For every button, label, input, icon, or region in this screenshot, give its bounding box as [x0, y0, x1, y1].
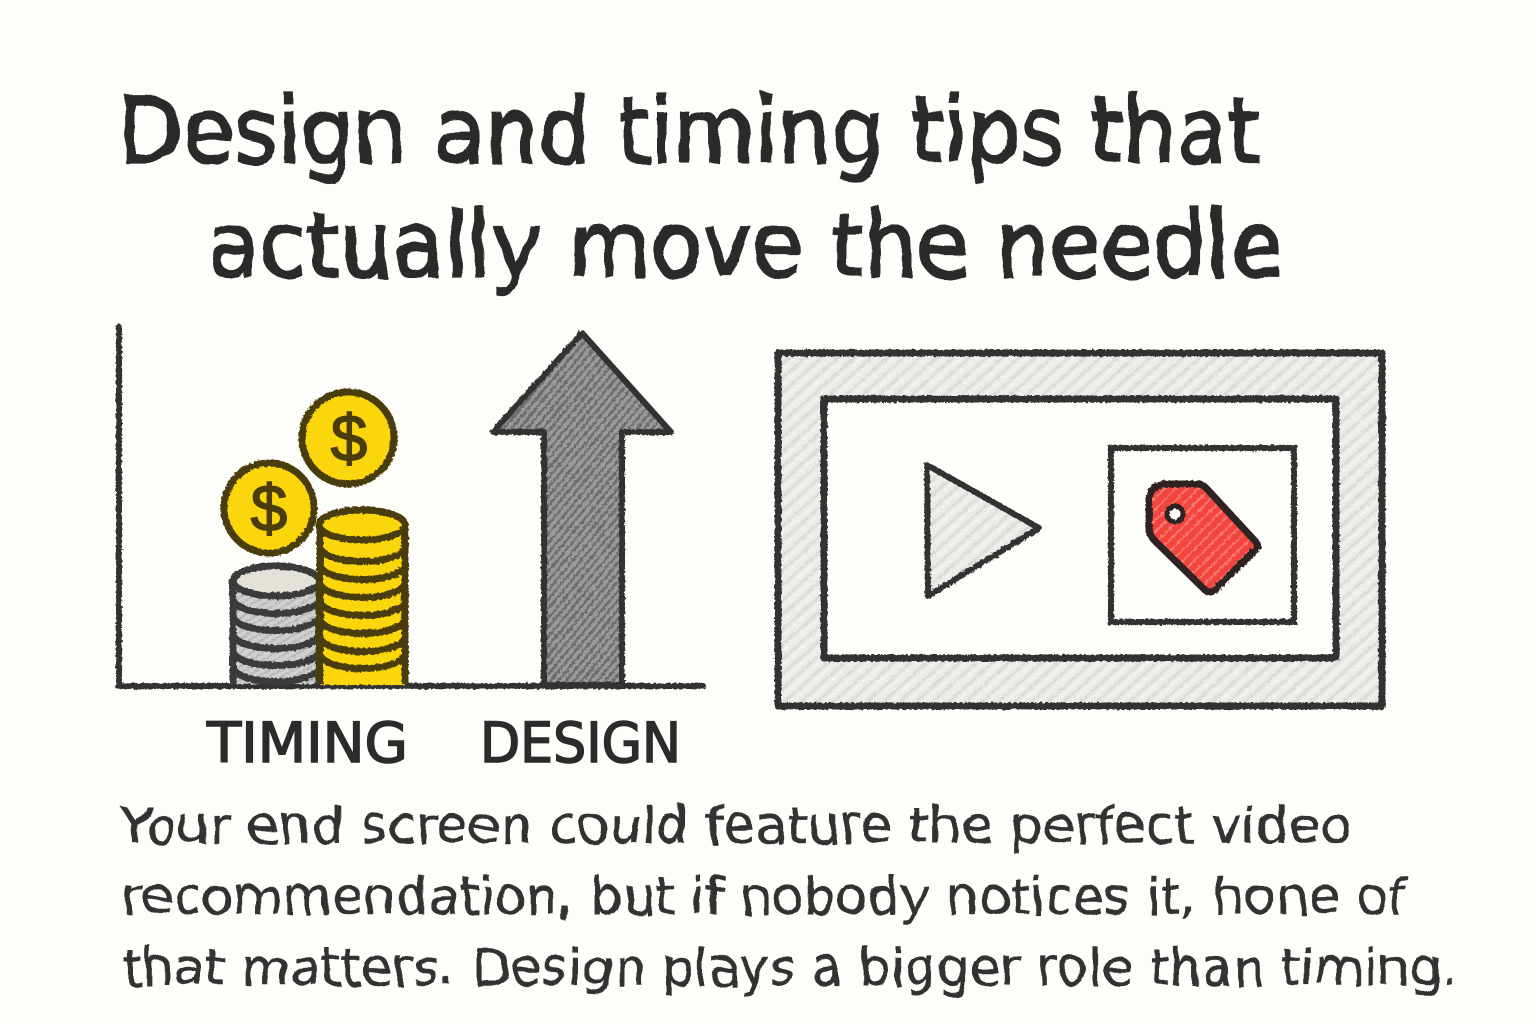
- body text: Your end screen could feature the perfect video: [119, 797, 1352, 856]
- video thumbnail box: [1111, 448, 1294, 622]
- title: [118, 79, 1282, 298]
- body text: recommendation, but if nobody notices it, hone of: [122, 868, 1407, 927]
- chart axes: [118, 327, 703, 686]
- icon: red price tag: [1149, 484, 1257, 592]
- label: timing: TIMING: [206, 711, 408, 775]
- screen frame: [778, 353, 1382, 706]
- title: actually move the needle: [208, 193, 1282, 298]
- icon: gray coin stack: [233, 566, 319, 684]
- icon: upper gold coin: [302, 392, 394, 484]
- body text: that matters. Design plays a bigger role than timing.: [122, 939, 1458, 998]
- icon: lower gold coin: [224, 463, 314, 553]
- body text: [119, 797, 1458, 998]
- label: design: DESIGN: [480, 711, 681, 775]
- icon: upper gold coin: $: [331, 401, 367, 475]
- title: Design and timing tips that: [118, 79, 1260, 184]
- panel: end screen mockup: [778, 353, 1382, 706]
- icon: play button: [927, 465, 1039, 596]
- arrow: design up arrow: [493, 333, 671, 685]
- icon: lower gold coin: $: [251, 471, 287, 545]
- chart: timing versus design: [118, 327, 703, 775]
- icon: gold coin stack: [319, 510, 405, 685]
